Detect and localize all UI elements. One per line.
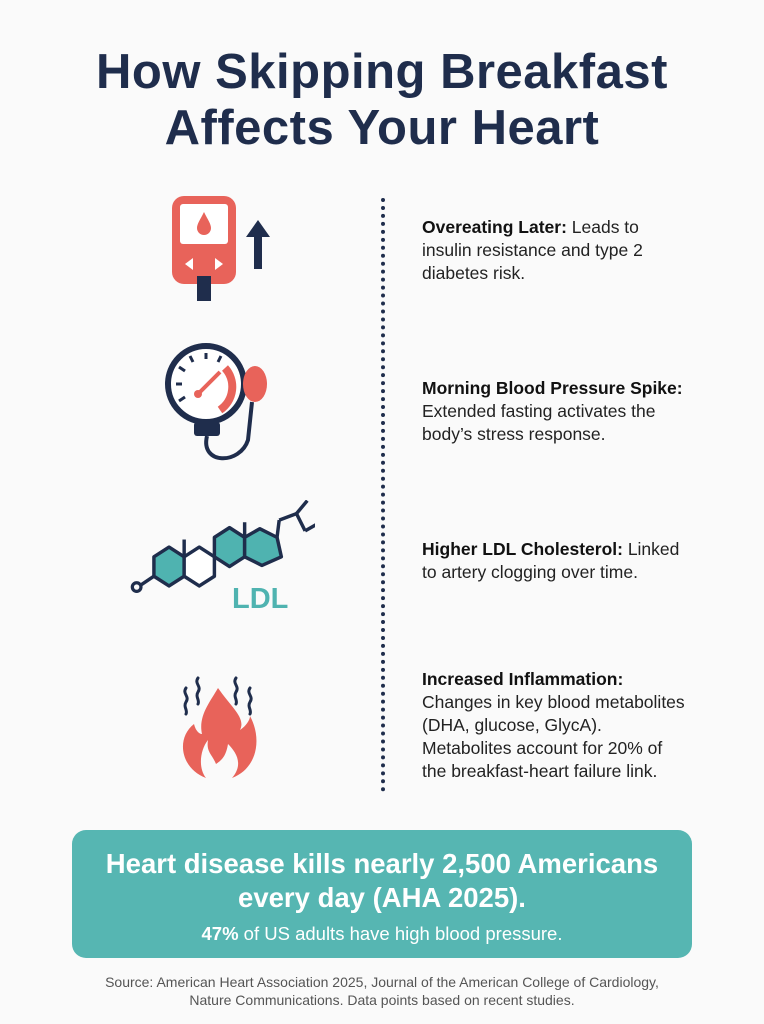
text: inflammation	[422, 669, 685, 781]
title: Affects Your Heart	[165, 101, 599, 155]
text: overeating: insulin resistance and type 2	[422, 240, 643, 260]
text: blood pressure: Morning Blood Pressure Spike:	[422, 378, 683, 398]
text: inflammation: the breakfast-heart failure link.	[422, 761, 657, 781]
text: inflammation: Changes in key blood metabolites	[422, 692, 685, 712]
text: blood pressure: body’s stress response.	[422, 424, 606, 444]
text: inflammation: Increased Inflammation:	[422, 669, 623, 689]
title	[96, 45, 668, 155]
text: overeating	[422, 217, 643, 283]
icon: blood pressure gauge	[165, 343, 267, 460]
icon: LDL molecule	[130, 500, 315, 615]
icon: flame	[182, 676, 256, 778]
text: LDL	[422, 539, 679, 582]
callout: stats box	[72, 830, 692, 958]
text: overeating: Overeating Later: Leads to	[422, 217, 639, 237]
callout headline	[106, 848, 658, 913]
callout subtext: 47% of US adults have high blood pressure.	[202, 923, 562, 944]
text: LDL: Higher LDL Cholesterol: Linked	[422, 539, 679, 559]
callout headline: every day (AHA 2025).	[238, 882, 526, 913]
text: inflammation: (DHA, glucose, GlycA).	[422, 715, 602, 735]
icon: LDL molecule: LDL	[232, 583, 288, 615]
text: inflammation: Metabolites account for 20% of	[422, 738, 662, 758]
text: blood pressure	[422, 378, 683, 444]
text: overeating: diabetes risk.	[422, 263, 525, 283]
source	[105, 974, 659, 1008]
text: LDL: to artery clogging over time.	[422, 562, 638, 582]
title: How Skipping Breakfast	[96, 45, 668, 99]
dotted divider	[381, 198, 385, 792]
source: Nature Communications. Data points based on recent studies.	[189, 992, 575, 1008]
callout headline: Heart disease kills nearly 2,500 Americans	[106, 848, 658, 879]
source: Source: American Heart Association 2025, Journal of the American College of Cardiology,	[105, 974, 659, 990]
icon: glucometer	[172, 196, 270, 301]
text: blood pressure: Extended fasting activates the	[422, 401, 655, 421]
